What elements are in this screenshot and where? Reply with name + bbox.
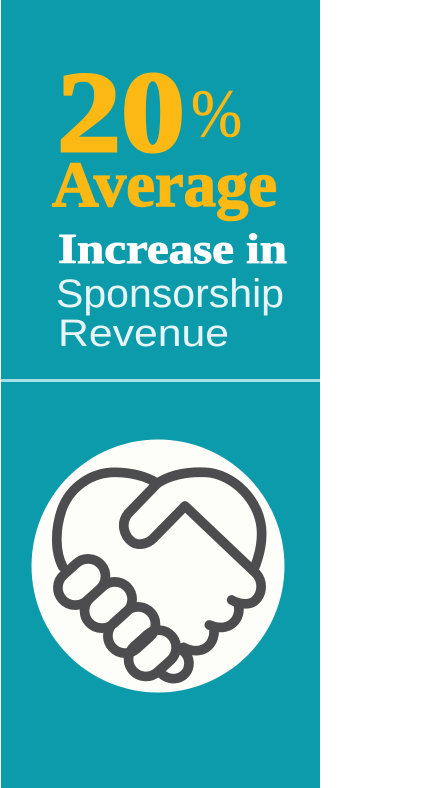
text: Sponsorship: Sponsorship (56, 272, 284, 316)
icon: handshake (51, 472, 262, 684)
text: Revenue: Revenue (58, 313, 229, 355)
panel: teal background (1, 0, 320, 788)
fingers (51, 552, 113, 612)
icon: handshake in circle (32, 440, 284, 692)
left heart arc (57, 472, 157, 567)
right heart arc (157, 472, 262, 568)
heading: Average: Average (52, 149, 277, 221)
stat block (52, 49, 287, 355)
thumb and upper hand (124, 483, 261, 604)
knuckles of right hand (183, 605, 239, 651)
heading: 20: 20 (57, 49, 185, 177)
heading: percent sign: % (191, 75, 242, 151)
text: Increase in: Increase in (58, 227, 287, 273)
icon background circle (32, 440, 284, 692)
panel divider (1, 379, 320, 382)
little finger (162, 650, 189, 679)
